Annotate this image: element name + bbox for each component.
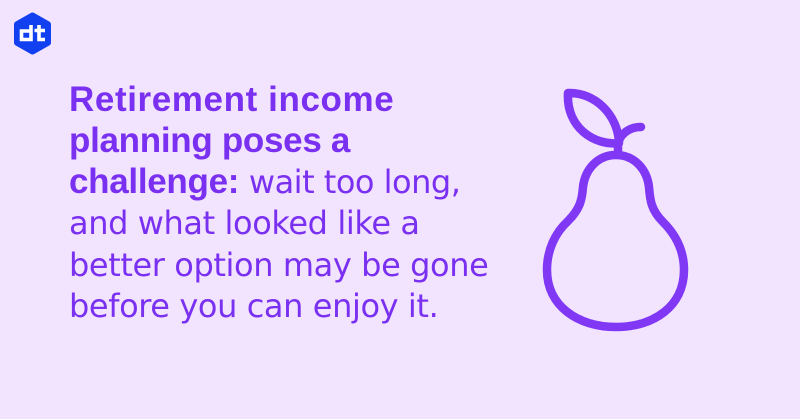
text block: retirement income message: better option may be gone bbox=[69, 246, 488, 284]
text block: retirement income message: challenge: wait too long, bbox=[69, 162, 460, 201]
text block: retirement income message: Retirement income bbox=[69, 80, 394, 119]
text block: retirement income message bbox=[69, 80, 488, 325]
text block: retirement income message: before you can enjoy it. bbox=[69, 287, 438, 325]
text block: retirement income message: and what looked like a bbox=[69, 204, 420, 242]
logo: dt hexagon bbox=[14, 12, 51, 54]
text block: retirement income message: planning poses a bbox=[69, 121, 350, 160]
